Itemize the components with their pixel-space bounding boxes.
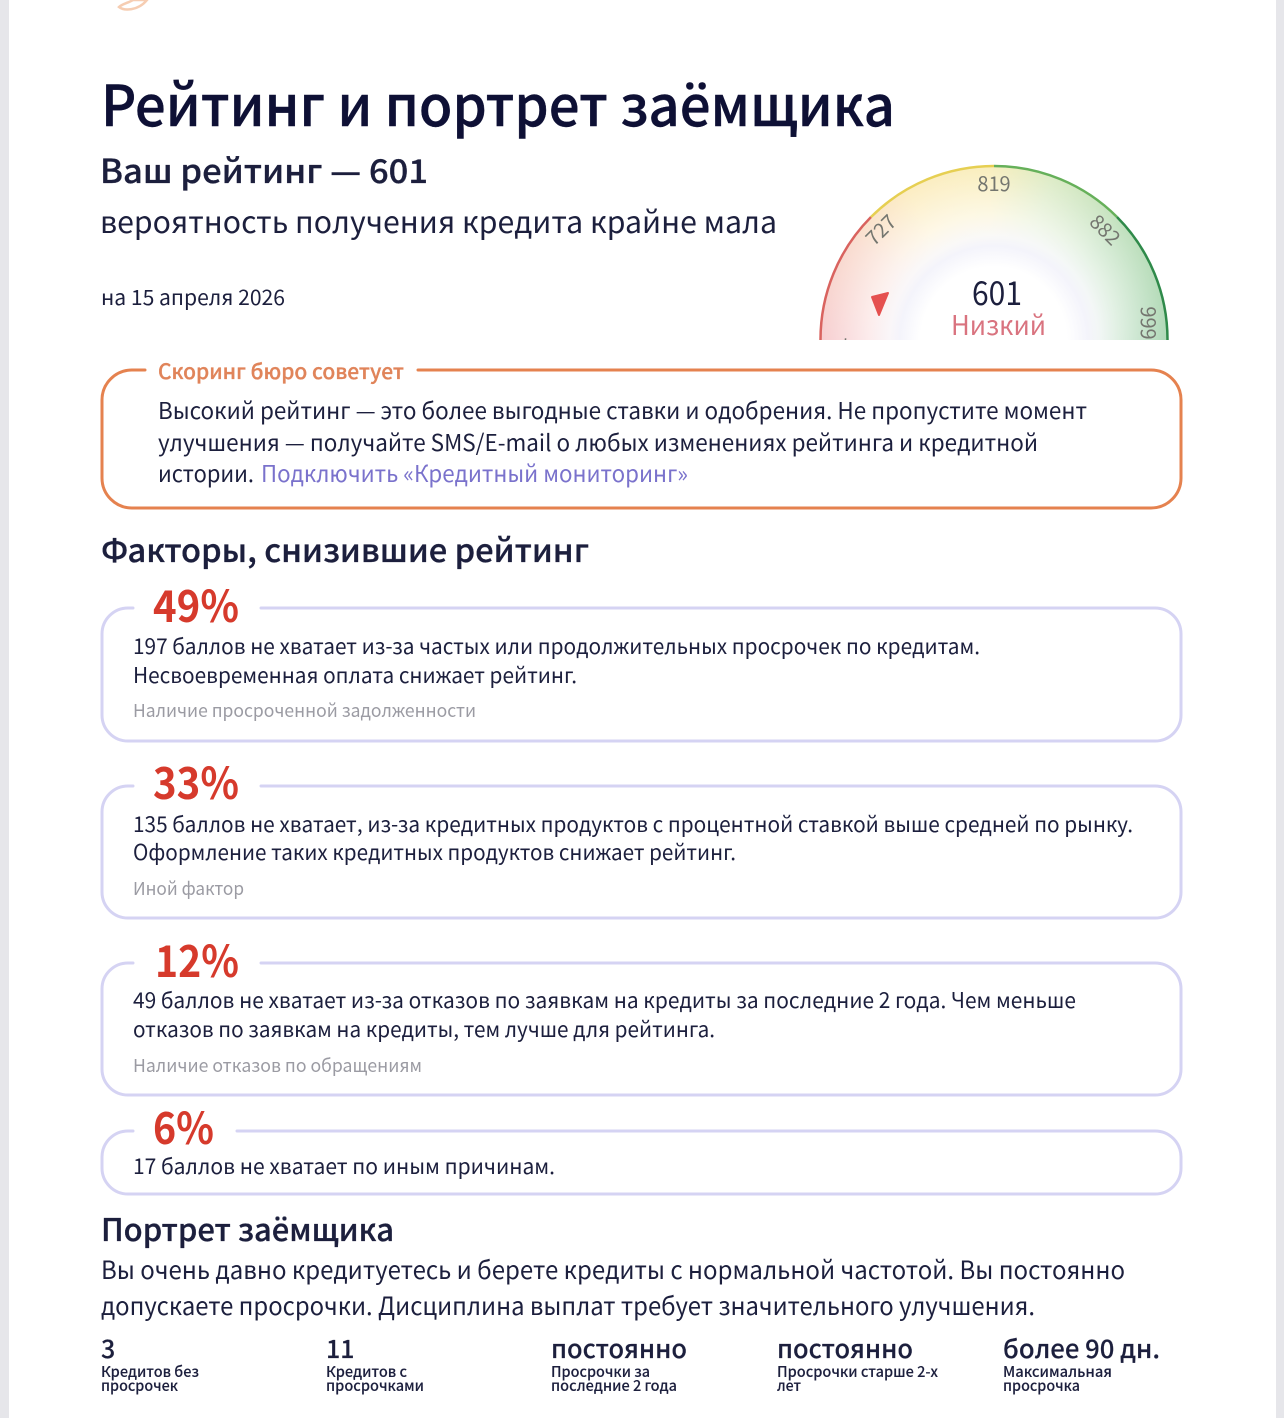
stat: overdue last 2 years: постоянно <box>551 1330 687 1366</box>
factor text: 49 баллов не хватает из-за отказов по заявкам на кредиты за последние 2 года. Чем меньше <box>133 984 1076 1015</box>
stat: overdue last 2 years: Просрочки за <box>551 1361 650 1382</box>
gauge chart <box>820 166 1168 349</box>
gauge tick 999: 999 <box>1135 306 1164 340</box>
gauge level: Низкий <box>951 304 1046 343</box>
percent 49: 49% <box>153 571 239 635</box>
panel: factor 6% <box>102 1093 1181 1194</box>
portrait text: допускаете просрочки. Дисциплина выплат требует значительного улучшения. <box>101 1287 1035 1323</box>
stat: credits with overdue: 11 <box>326 1330 355 1366</box>
stat: max overdue: просрочка <box>1003 1375 1080 1396</box>
portrait heading: Портрет заёмщика <box>101 1205 394 1250</box>
factor text: отказов по заявкам на кредиты, тем лучше для рейтинга. <box>133 1013 715 1044</box>
factor category: Наличие просроченной задолженности <box>133 697 476 723</box>
percent 6: 6% <box>153 1093 214 1157</box>
percent 12: 12% <box>155 926 239 990</box>
stat: credits with overdue: просрочками <box>326 1375 424 1396</box>
gauge score: 601 <box>972 267 1022 315</box>
stat: max overdue: Максимальная <box>1003 1361 1112 1382</box>
stat: credits with overdue <box>326 1330 424 1396</box>
factor text: Несвоевременная оплата снижает рейтинг. <box>133 659 577 690</box>
advice text: Подключить «Кредитный мониторинг» <box>261 455 688 489</box>
factor category: Наличие отказов по обращениям <box>133 1052 422 1078</box>
advice text: улучшения — получайте SMS/E-mail о любых изменениях рейтинга и кредитной <box>158 424 1038 458</box>
portrait text: Вы очень давно кредитуетесь и берете кредиты с нормальной частотой. Вы постоянно <box>101 1251 1125 1287</box>
gauge tick clipped: 1 <box>823 335 852 349</box>
stat: overdue older than 2 years: постоянно <box>777 1330 913 1366</box>
factor text: Оформление таких кредитных продуктов снижает рейтинг. <box>133 836 736 867</box>
stat: credits without overdue: просрочек <box>101 1375 178 1396</box>
gauge red arc <box>820 217 871 340</box>
stat: credits without overdue: Кредитов без <box>101 1361 199 1382</box>
gauge tick 882: 882 <box>1084 207 1128 251</box>
stat: overdue older than 2 years: лет <box>777 1375 801 1396</box>
stat: overdue last 2 years <box>551 1330 687 1396</box>
factor category: Иной фактор <box>133 875 244 901</box>
title: Рейтинг и портрет заёмщика <box>101 62 895 143</box>
stat: overdue older than 2 years: Просрочки старше 2-х <box>777 1361 938 1382</box>
advice text: истории. <box>158 455 254 489</box>
stat: max overdue <box>1003 1330 1160 1396</box>
gauge gradient fill <box>820 166 1168 340</box>
panel: factor 49% <box>102 571 1181 741</box>
factors heading: Факторы, снизившие рейтинг <box>101 526 589 572</box>
percent 33: 33% <box>153 748 239 812</box>
advice heading: Скоринг бюро советует <box>158 356 404 386</box>
gauge light green arc <box>994 166 1117 217</box>
panel: factor 33% <box>102 748 1181 918</box>
gauge tick 819: 819 <box>977 168 1011 197</box>
gauge pointer <box>872 293 888 315</box>
stat: credits without overdue <box>101 1330 199 1396</box>
panel: factor 12% <box>102 926 1181 1095</box>
stat: overdue older than 2 years <box>777 1330 938 1396</box>
stat: credits with overdue: Кредитов с <box>326 1361 407 1382</box>
stat: overdue last 2 years: последние 2 года <box>551 1375 677 1396</box>
factor text <box>133 630 980 690</box>
stat: max overdue: более 90 дн. <box>1003 1330 1160 1366</box>
panel: advice <box>102 356 1181 508</box>
factor text: 135 баллов не хватает, из-за кредитных продуктов с процентной ставкой выше средней по рынку. <box>133 808 1133 839</box>
gauge tick 727: 727 <box>858 207 902 251</box>
gauge yellow arc <box>871 166 994 217</box>
factor text <box>133 808 1133 867</box>
advice text <box>158 392 1087 489</box>
logo fragment <box>119 0 147 9</box>
portrait text <box>101 1251 1125 1323</box>
advice text: Высокий рейтинг — это более выгодные ставки и одобрения. Не пропустите момент <box>158 392 1087 426</box>
factor text: 197 баллов не хватает из-за частых или продолжительных просрочек по кредитам. <box>133 630 980 661</box>
stat: credits without overdue: 3 <box>101 1330 115 1366</box>
rating heading: Ваш рейтинг — 601 <box>100 145 428 193</box>
factor text <box>133 984 1076 1044</box>
rating description: вероятность получения кредита крайне мала <box>100 198 777 242</box>
gauge dark green arc <box>1117 217 1168 340</box>
date: на 15 апреля 2026 <box>101 282 285 312</box>
factor text: 17 баллов не хватает по иным причинам. <box>133 1150 555 1181</box>
